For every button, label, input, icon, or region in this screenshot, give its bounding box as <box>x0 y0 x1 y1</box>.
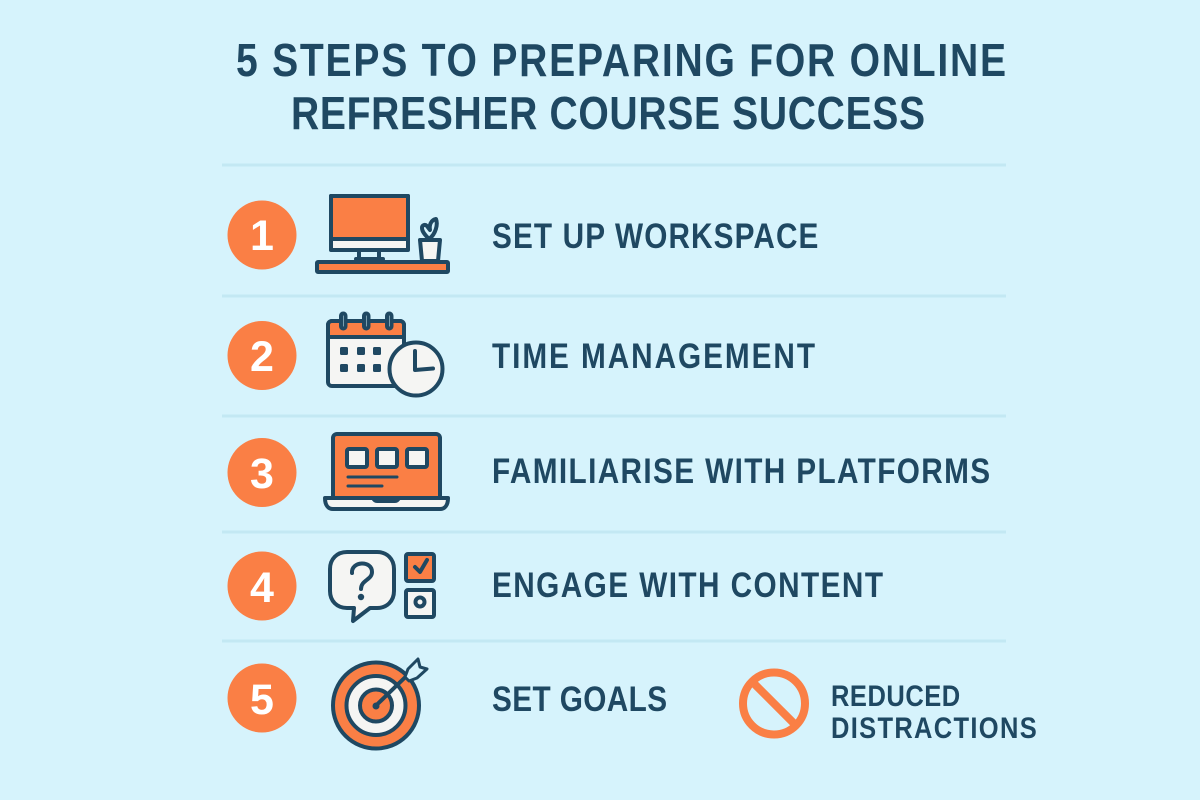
icon: target with arrow <box>333 659 427 748</box>
number badge 4 <box>228 552 296 620</box>
icon: laptop with tiles <box>325 434 448 509</box>
step 1: set up workspace <box>228 196 818 272</box>
icon: prohibition sign <box>743 672 805 734</box>
label: engage with content: ENGAGE WITH CONTENT <box>492 566 883 605</box>
title: 5 STEPS TO PREPARING FOR ONLINE <box>236 35 1006 87</box>
label: set goals: SET GOALS <box>492 680 667 719</box>
step 5: set goals <box>228 659 667 748</box>
label: reduced distractions <box>831 679 1037 744</box>
step 4: engage with content <box>228 552 883 621</box>
icon: desktop monitor on desk with plant <box>317 196 448 272</box>
label: reduced distractions: REDUCED <box>831 679 960 712</box>
step 2: time management <box>228 314 815 396</box>
label: reduced distractions: DISTRACTIONS <box>831 711 1037 744</box>
step 3: familiarise with platforms <box>228 434 990 509</box>
icon: calendar with clock <box>328 314 442 396</box>
number badge 3: 3 <box>250 450 274 498</box>
label: time management: TIME MANAGEMENT <box>492 337 815 376</box>
number badge 1: 1 <box>250 212 274 260</box>
label: set up workspace: SET UP WORKSPACE <box>492 217 818 256</box>
number badge 4: 4 <box>250 564 274 612</box>
callout: reduced distractions <box>743 672 1037 744</box>
number badge 2 <box>228 321 296 390</box>
title: REFRESHER COURSE SUCCESS <box>291 88 925 140</box>
number badge 5: 5 <box>250 676 274 724</box>
number badge 5 <box>228 664 296 732</box>
icon: question bubble with checkboxes <box>330 552 434 621</box>
number badge 1 <box>228 200 296 270</box>
label: familiarise with platforms: FAMILIARISE WITH PLATFORMS <box>492 452 990 491</box>
number badge 2: 2 <box>250 333 274 381</box>
title <box>236 35 1006 140</box>
number badge 3 <box>228 438 296 507</box>
